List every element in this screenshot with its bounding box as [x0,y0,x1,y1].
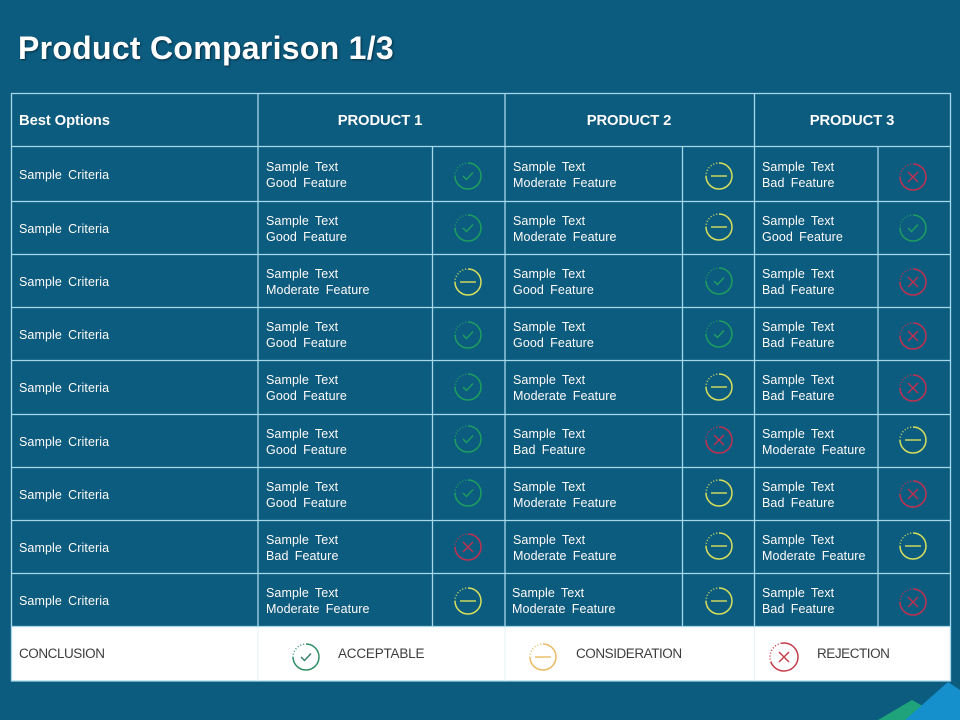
row 3 [19,267,926,297]
table grid [12,94,950,681]
row 8: Moderate Feature [762,549,866,563]
header row: Best Options [19,113,110,129]
row 9: Sample Criteria [19,594,109,608]
row 8: Bad Feature [266,549,338,563]
row 4: Sample Criteria [19,328,109,342]
row 8: Sample Criteria [19,541,109,555]
row 8: Sample Text [762,533,835,547]
row 7: Bad Feature [762,496,834,510]
row 2: Good Feature [762,230,843,244]
row 9 [19,586,926,616]
header row: PRODUCT 2 [587,113,671,129]
row 8 [19,533,926,563]
row 2: Sample Text [513,214,586,228]
row 5: Good Feature [266,389,347,403]
row 1: Good Feature [266,176,347,190]
row 6 [19,426,926,457]
row 6: Bad Feature [513,443,586,457]
row 4: Good Feature [513,336,594,350]
conclusion legend: CONSIDERATION [576,646,682,661]
row 6: Good Feature [266,443,347,457]
row 7: Sample Text [762,480,835,494]
row 3: Bad Feature [762,283,834,297]
row 7: Moderate Feature [513,496,617,510]
conclusion legend [19,643,889,671]
row 9: Moderate Feature [512,602,616,616]
row 6: Moderate Feature [762,443,866,457]
conclusion row background [11,626,950,681]
conclusion legend: REJECTION [817,646,889,661]
row 5 [19,373,926,403]
row 6: Sample Criteria [19,435,109,449]
header row: PRODUCT 1 [338,113,422,129]
row 1: Sample Criteria [19,168,109,182]
row 4: Sample Text [266,320,339,334]
row 5: Sample Text [762,373,835,387]
row 2: Sample Text [762,214,835,228]
row 4: Good Feature [266,336,347,350]
row 7: Sample Text [266,480,339,494]
row 3: Sample Criteria [19,275,109,289]
row 4: Bad Feature [762,336,834,350]
row 8: Sample Text [513,533,586,547]
row 2 [19,214,926,244]
row 1: Sample Text [513,160,586,174]
header row: PRODUCT 3 [810,113,894,129]
row 5: Sample Text [266,373,339,387]
row 3: Moderate Feature [266,283,370,297]
row 9: Moderate Feature [266,602,370,616]
row 5: Sample Criteria [19,381,109,395]
row 3: Good Feature [513,283,594,297]
row 5: Sample Text [513,373,586,387]
row 1: Sample Text [266,160,339,174]
row 7: Sample Text [513,480,586,494]
row 4: Sample Text [513,320,586,334]
row 2: Moderate Feature [513,230,617,244]
corner decoration [878,682,960,720]
row 4 [19,320,926,350]
row 9: Sample Text [512,586,585,600]
row 2: Sample Text [266,214,339,228]
row 8: Sample Text [266,533,339,547]
row 7: Good Feature [266,496,347,510]
row 1: Sample Text [762,160,835,174]
row 9: Sample Text [266,586,339,600]
row 7: Sample Criteria [19,488,109,502]
row 1: Bad Feature [762,176,834,190]
row 1 [19,160,926,190]
header row [19,113,894,129]
row 5: Bad Feature [762,389,834,403]
conclusion legend: CONCLUSION [19,646,105,661]
row 7 [19,480,926,510]
row 4: Sample Text [762,320,835,334]
row 8: Moderate Feature [513,549,617,563]
title: Product Comparison 1/3 [18,30,394,66]
row 1: Moderate Feature [513,176,617,190]
row 3: Sample Text [266,267,339,281]
row 2: Good Feature [266,230,347,244]
row 6: Sample Text [266,427,339,441]
row 9: Bad Feature [762,602,834,616]
row 6: Sample Text [762,427,835,441]
row 9: Sample Text [762,586,835,600]
conclusion legend: ACCEPTABLE [338,646,424,661]
row 2: Sample Criteria [19,222,109,236]
row 3: Sample Text [762,267,835,281]
row 5: Moderate Feature [513,389,617,403]
row 6: Sample Text [513,427,586,441]
row 3: Sample Text [513,267,586,281]
